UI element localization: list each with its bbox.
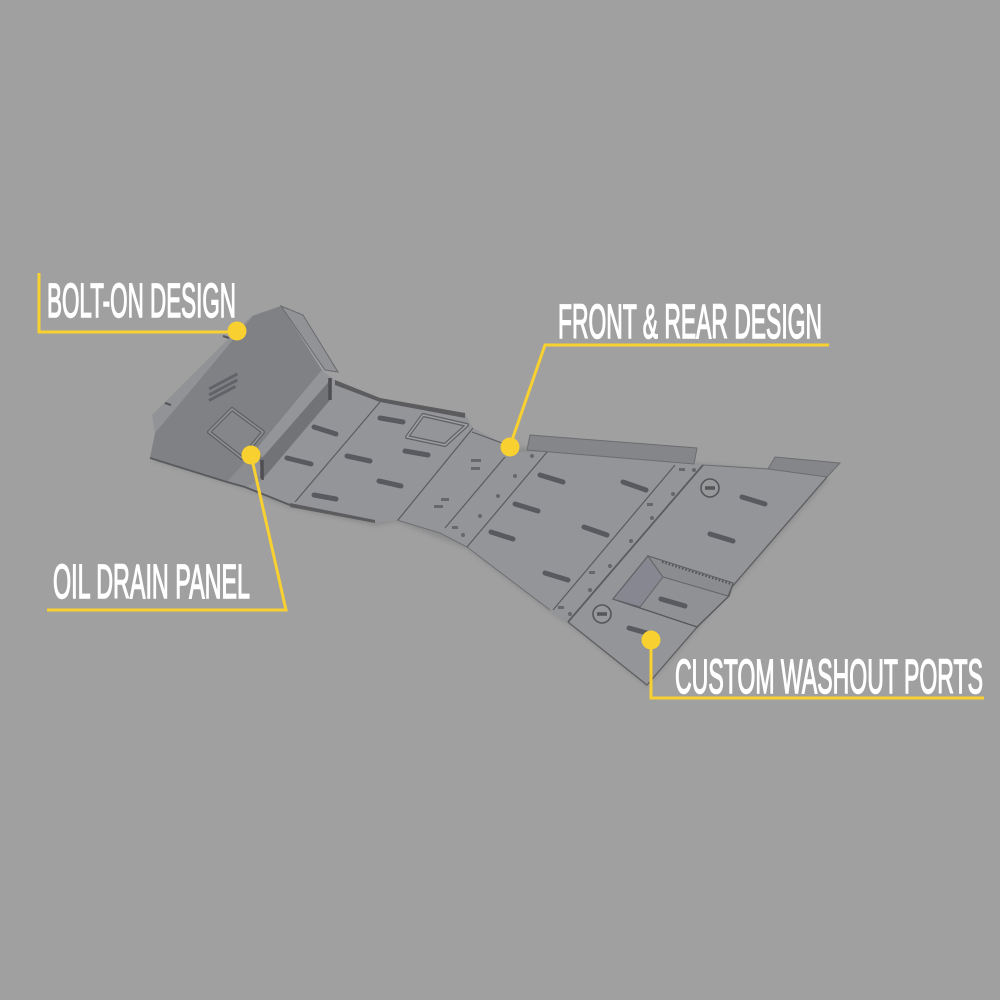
bottom lip <box>290 503 375 523</box>
plate floor <box>245 373 827 685</box>
edge strip <box>568 477 827 685</box>
lower corner strip <box>227 465 262 487</box>
seams <box>295 402 703 622</box>
keyhole fittings <box>593 479 719 623</box>
logo stamp <box>208 373 238 402</box>
front flange <box>527 435 697 464</box>
top lip <box>335 380 465 418</box>
channel inner <box>258 370 332 458</box>
panel lower edge <box>150 458 290 505</box>
bolt-on main panel <box>150 306 322 482</box>
lower middle edge <box>397 520 550 610</box>
callout: oil drain panel: OIL DRAIN PANEL <box>53 556 250 609</box>
washout port <box>613 556 733 627</box>
bolt holes <box>434 454 696 616</box>
top right flange <box>281 306 338 372</box>
callout: front and rear design <box>500 296 829 456</box>
callout: bolt-on design <box>39 273 246 340</box>
rear flange <box>768 457 840 477</box>
channel wall <box>258 373 332 480</box>
oil drain panel one <box>209 409 263 458</box>
flange marks <box>165 336 229 405</box>
callout: oil drain panel <box>47 446 286 610</box>
drain slots <box>287 418 765 634</box>
callout: custom washout ports <box>642 630 984 704</box>
skid plate illustration <box>150 306 840 685</box>
channel post <box>262 378 330 480</box>
top edge line <box>703 465 768 469</box>
plate shadow <box>150 384 829 687</box>
bolt-on flange <box>152 306 281 433</box>
oil drain panel two <box>407 415 467 445</box>
infographic canvas: BOLT-ON DESIGN <box>47 275 236 328</box>
